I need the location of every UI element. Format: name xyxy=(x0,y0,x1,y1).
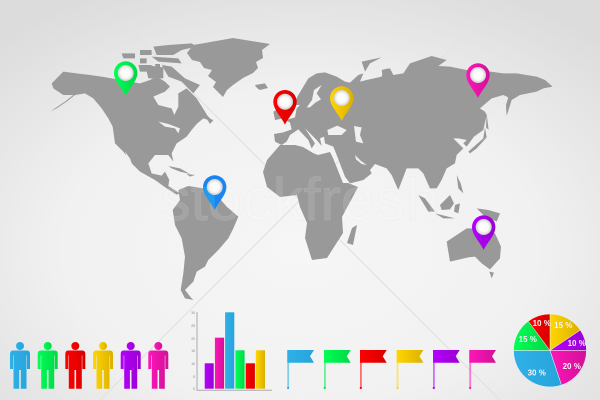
slice: red 10 percent xyxy=(528,314,550,350)
eurasia xyxy=(255,56,553,190)
flag: blue xyxy=(287,350,314,389)
person: red xyxy=(65,342,85,389)
iceland xyxy=(255,84,268,90)
pin: purple xyxy=(472,215,495,250)
axis labels: 0 xyxy=(193,387,195,391)
pie labels: 10 % xyxy=(568,339,586,348)
africa xyxy=(263,145,358,260)
axis labels: 10 xyxy=(191,362,195,366)
axis labels: 5 xyxy=(193,375,195,379)
pin: blue xyxy=(203,175,226,210)
slice: green 15 percent xyxy=(514,321,550,350)
axis labels: 30 xyxy=(191,311,195,315)
person: yellow xyxy=(93,342,113,389)
person: blue xyxy=(10,342,30,389)
pie labels: 15 % xyxy=(519,335,537,344)
flag: red xyxy=(360,350,387,389)
bars xyxy=(205,312,265,389)
pie labels: 10 % xyxy=(533,319,551,328)
flag: magenta xyxy=(469,350,496,389)
pin: magenta xyxy=(466,63,490,98)
axis labels xyxy=(191,311,195,391)
pie labels xyxy=(519,319,586,378)
pie labels: 15 % xyxy=(554,321,572,330)
flag: green xyxy=(324,350,351,389)
axes xyxy=(197,312,272,390)
bar chart xyxy=(191,311,272,391)
flag: purple xyxy=(433,350,460,389)
flag: yellow xyxy=(396,350,423,389)
madagascar xyxy=(347,225,357,245)
person: magenta xyxy=(148,342,168,389)
person: purple xyxy=(121,342,141,389)
axis labels: 15 xyxy=(191,349,195,353)
slice: blue 30 percent xyxy=(514,350,562,387)
slice: purple 10 percent xyxy=(550,330,587,350)
pin: red xyxy=(273,90,297,125)
pin: yellow xyxy=(330,86,353,121)
pie chart xyxy=(514,314,587,387)
greenland xyxy=(187,38,270,97)
flags xyxy=(287,350,496,389)
pin: green xyxy=(114,61,137,96)
world map xyxy=(50,38,553,300)
person: green xyxy=(38,342,58,389)
southeast asia, indonesia and australia xyxy=(418,175,501,278)
axis labels: 25 xyxy=(191,324,195,328)
people icons xyxy=(10,342,168,389)
slice: magenta 20 percent xyxy=(550,350,586,385)
south america xyxy=(173,186,238,300)
slice: yellow 15 percent xyxy=(550,314,580,350)
axis labels: 20 xyxy=(191,337,195,341)
watermark: stockfresh xyxy=(160,166,440,233)
pie labels: 30 % xyxy=(528,368,546,378)
north america xyxy=(50,43,213,195)
pie labels: 20 % xyxy=(563,362,581,371)
